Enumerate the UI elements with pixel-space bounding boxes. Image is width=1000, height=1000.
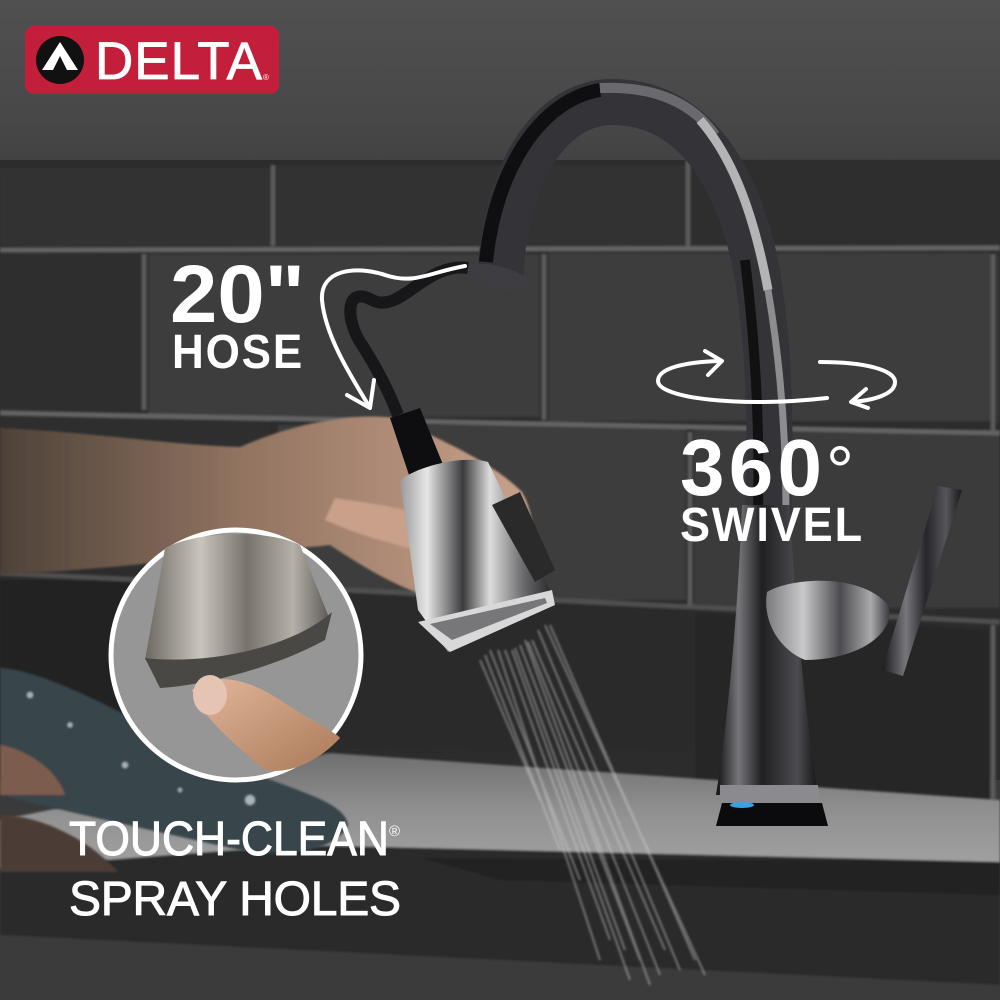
callout: touch-clean spray holes (69, 813, 401, 926)
spray head (390, 408, 555, 652)
callout: touch-clean spray holes: SPRAY HOLES (69, 873, 401, 926)
plate in foreground (0, 668, 348, 872)
callout: 360 swivel: ° (826, 432, 854, 510)
hose (350, 268, 468, 415)
icon: delta mark (36, 36, 84, 84)
faucet body (716, 505, 818, 795)
callout: 360 swivel: SWIVEL (680, 499, 864, 552)
countertop (0, 753, 1000, 1000)
arrow: hose length (322, 266, 465, 408)
callout: 20 inch hose (170, 249, 465, 408)
delta logo (25, 26, 279, 94)
faucet spout (486, 88, 786, 520)
icon: rotation arrows (658, 351, 895, 408)
delta logo: ® (263, 73, 269, 82)
faucet (468, 88, 962, 826)
callout: 20 inch hose: 20" (170, 249, 305, 340)
lever handle (766, 486, 962, 676)
touch-clean inset (111, 530, 361, 780)
delta logo: DELTA (95, 32, 263, 91)
hand and forearm (0, 417, 532, 600)
callout: touch-clean spray holes: ® (389, 823, 400, 840)
callout: 360 swivel: 360 (680, 423, 822, 512)
callout: touch-clean spray holes: TOUCH-CLEAN (69, 813, 389, 866)
faucet base (716, 785, 828, 826)
callout: 360 swivel (658, 351, 895, 552)
backsplash tiles (0, 160, 1000, 803)
water spray (480, 625, 705, 985)
callout: 20 inch hose: HOSE (172, 326, 304, 379)
